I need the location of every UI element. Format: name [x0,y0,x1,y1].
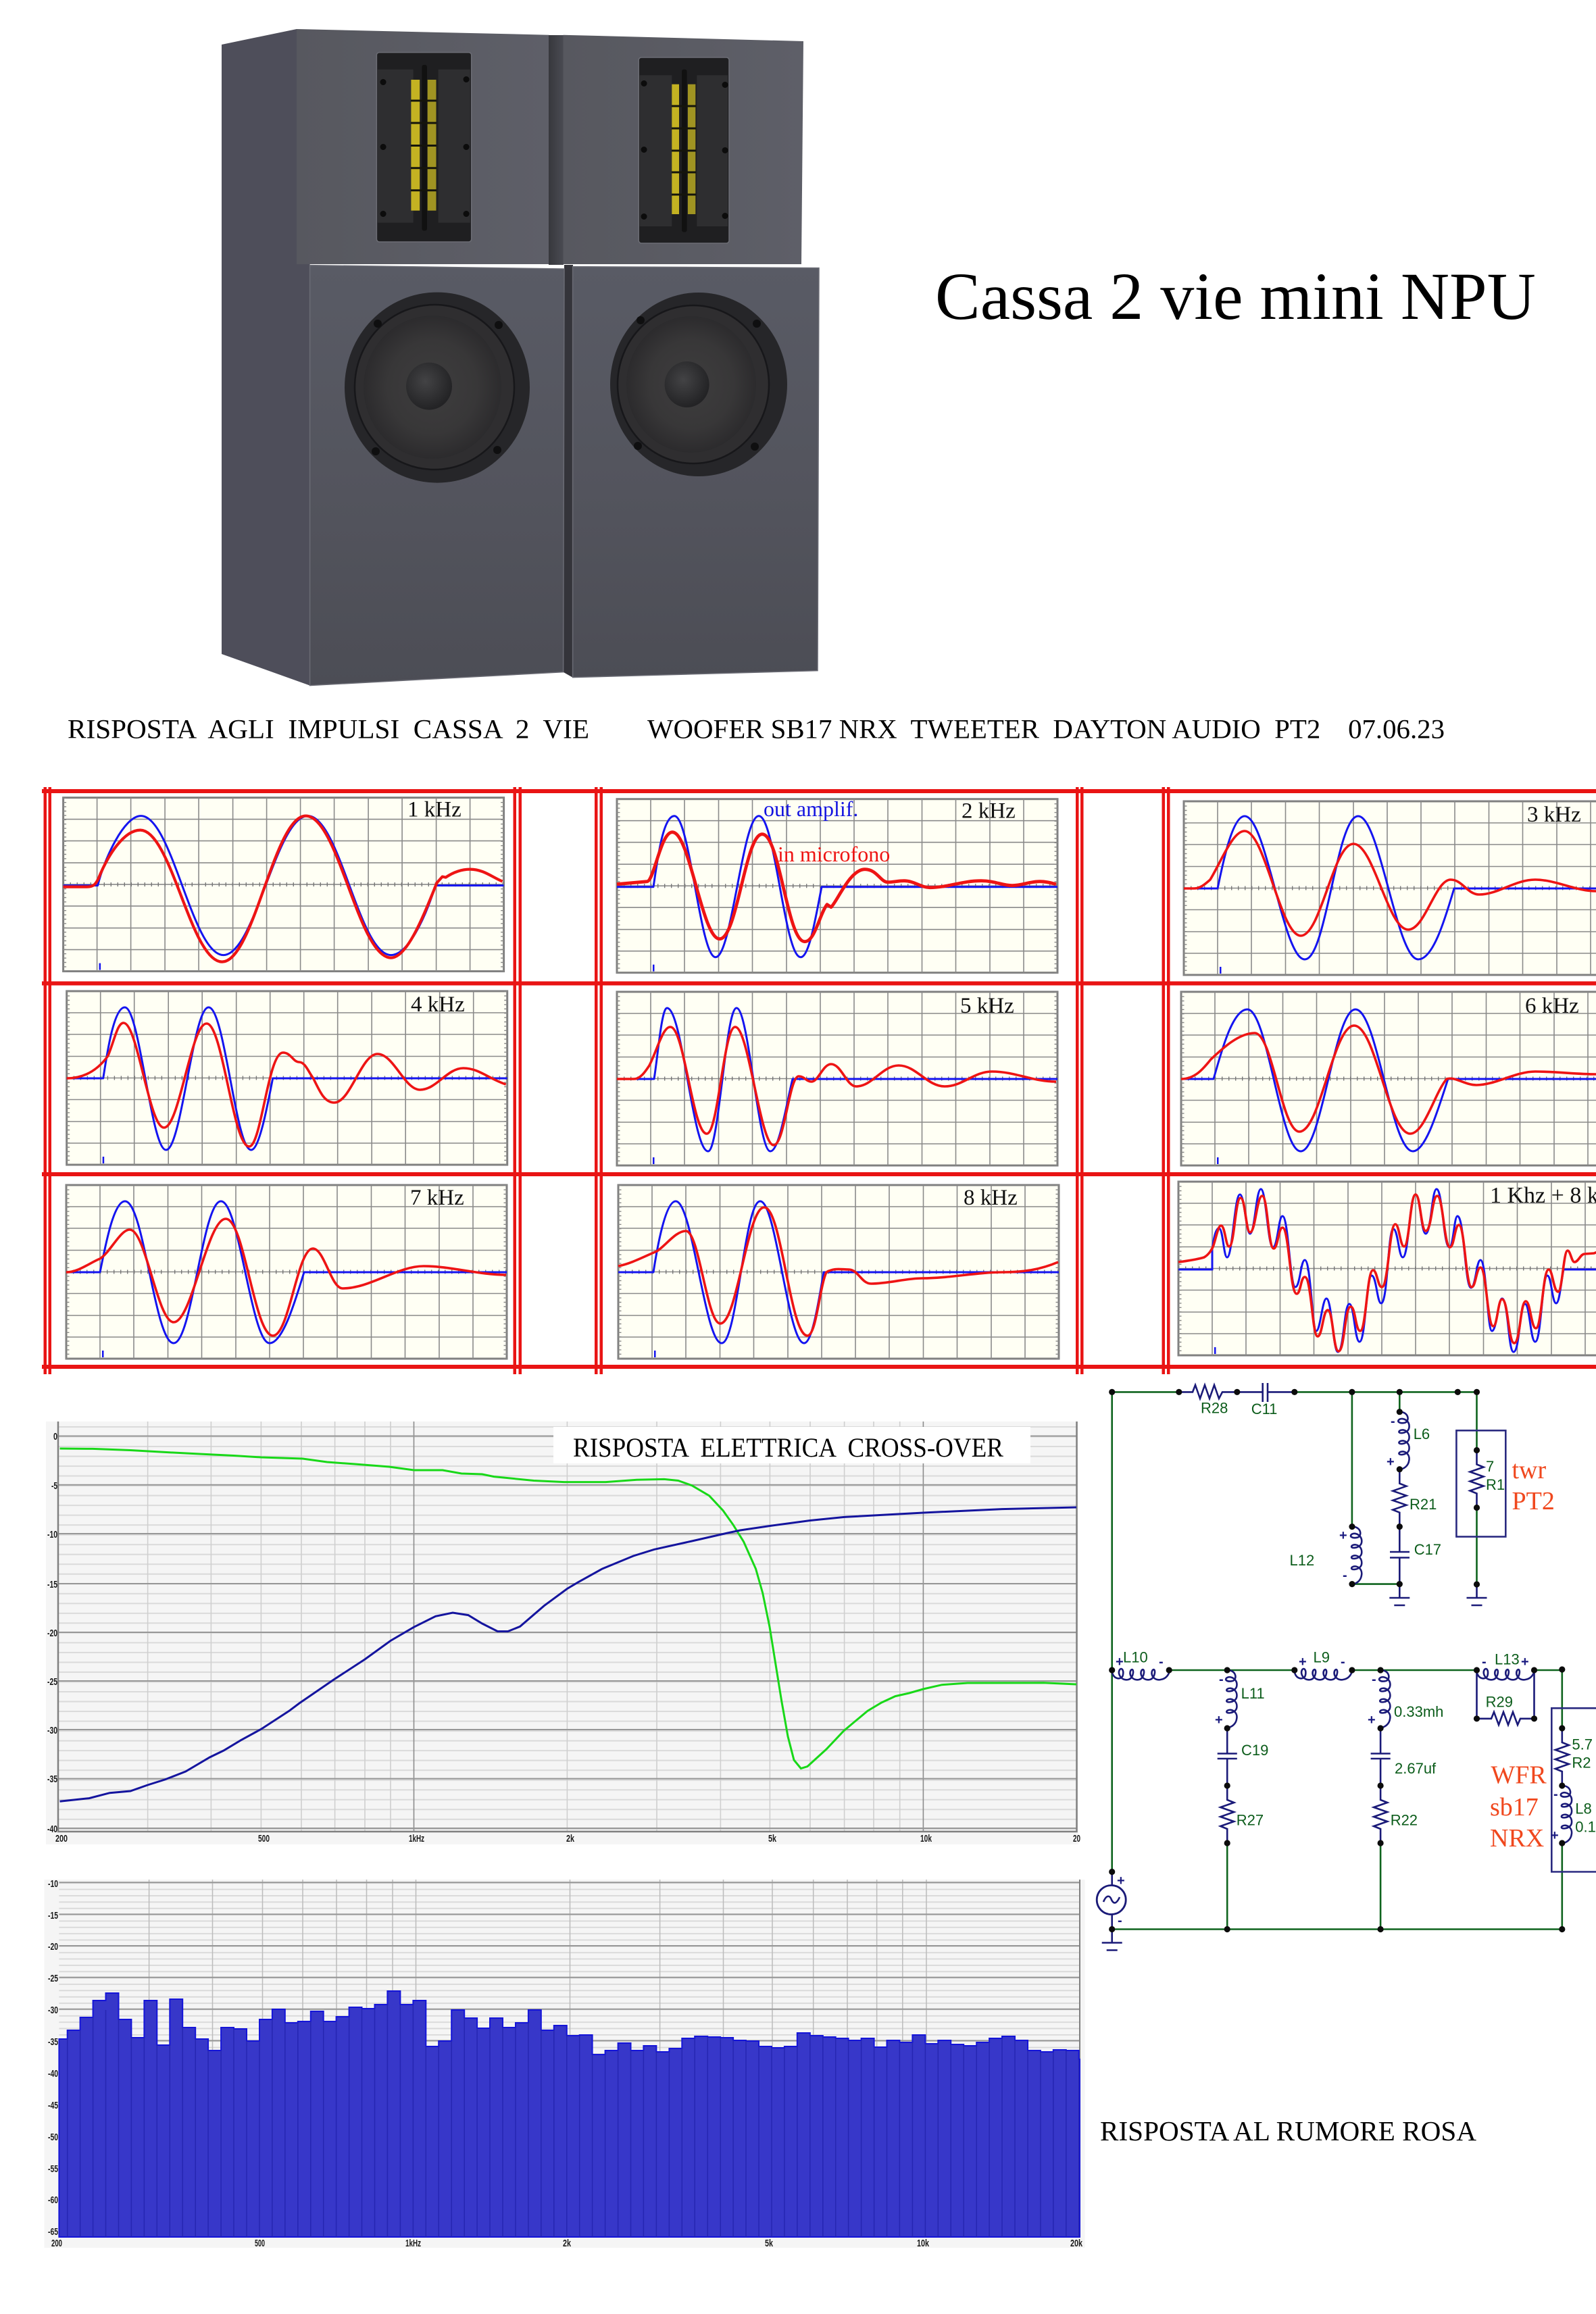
inductor L12: - [1343,1568,1347,1583]
inductor L12: + [1339,1528,1347,1543]
capacitor C11 [1237,1383,1295,1417]
vertical grid lines [148,1422,900,1832]
lower right woofer cabinet [573,267,819,678]
capacitor C11: C11 [1251,1401,1277,1417]
panel: 8 kHz oscilloscope [618,1185,1059,1359]
blue trace [66,1201,507,1343]
capacitor C17: C17 [1414,1541,1441,1558]
panel: 6 kHz oscilloscope [1181,992,1596,1165]
upper left tweeter cabinet [297,29,549,264]
blue trace [618,1201,1059,1343]
major grid lines [59,1882,1080,2040]
y axis labels: -55 [48,2163,58,2175]
y axis labels: -25 [48,1973,58,1984]
caption: pink noise: RISPOSTA AL RUMORE ROSA [1100,2115,1476,2146]
subtitle: impulse response: RISPOSTA AGLI IMPULSI CASSA 2 VIE [68,714,589,745]
major grid lines [58,1436,1077,1828]
resistor R29 [1477,1670,1534,1725]
y axis labels: -35 [47,1774,57,1785]
capacitor 2.67uf: 2.67uf [1395,1760,1437,1777]
tweeter box with R1 [1456,1430,1505,1536]
circuit nodes [1109,1389,1565,1932]
blue trace [1181,1009,1596,1151]
ground symbol 3 [1102,1930,1122,1950]
label: 1 kHz [407,798,462,822]
inductor L6: + [1387,1455,1395,1469]
red trace [617,1027,1056,1145]
label: woofer [1490,1761,1547,1853]
subtitle: drivers and date: WOOFER SB17 NRX TWEETER DAYTON AUDIO PT2 07.06.23 [647,714,1445,745]
inductor L13 [1477,1651,1534,1680]
x axis labels: 20 [1073,1833,1080,1844]
label: 2 kHz [962,799,1016,824]
inductor L10: - [1159,1655,1164,1669]
inductor L6: - [1391,1414,1395,1429]
inductor L10: L10 [1123,1649,1148,1666]
blue trace [617,1008,1057,1151]
speaker pair photo illustration [222,29,819,686]
x axis labels: 1kHz [409,1833,424,1844]
blue trace [617,816,1057,957]
y axis labels: -15 [47,1579,57,1590]
AC source: - [1118,1913,1122,1928]
x axis labels: 200 [55,1833,68,1844]
panel: 3 kHz oscilloscope [1184,801,1596,975]
green curve: woofer [59,1449,1076,1769]
blue trace [1184,816,1596,959]
upper right tweeter cabinet [564,35,803,264]
inductor 0.33mh: + [1368,1713,1376,1728]
crossover schematic [1097,1383,1596,1950]
y axis labels: -20 [47,1628,57,1639]
x axis labels: 1kHz [405,2238,421,2249]
red trace [1184,831,1596,936]
capacitor 2.67uf [1371,1728,1437,1786]
resistor R28: R28 [1201,1399,1228,1416]
AC source: + [1117,1873,1125,1888]
chart: crossover electrical response [46,1422,1080,1844]
capacitor C19: C19 [1241,1742,1268,1759]
x axis labels: 5k [768,1833,776,1844]
red frame around oscilloscope grid [42,787,1596,1374]
minor grid lines [59,1882,1080,2085]
chart background [46,1422,1078,1844]
y axis labels: -40 [48,2068,58,2080]
chart: pink noise response [45,1878,1085,2249]
inductor L9: + [1299,1655,1307,1669]
red trace [1181,1026,1596,1134]
chart background [45,1880,1085,2248]
left woofer [345,293,530,483]
resistor R27: R27 [1237,1812,1264,1829]
resistor R21 [1393,1469,1437,1527]
minor grid lines [58,1426,1077,1832]
label: 4 kHz [411,992,465,1017]
x axis labels: 20k [1070,2238,1082,2249]
blue bar spectrum [59,1991,1080,2237]
lower left woofer cabinet [310,266,564,686]
panel: 5 kHz oscilloscope [617,992,1057,1165]
left ribbon tweeter [376,53,472,242]
y axis labels: -15 [48,1910,58,1921]
inductor L6: L6 [1414,1426,1430,1442]
resistor R21: R21 [1410,1496,1437,1513]
label: tweeter [1512,1456,1555,1515]
inductor L9: L9 [1314,1649,1330,1666]
label: tweeter: twr [1512,1456,1546,1484]
y axis labels: -45 [48,2100,58,2111]
y axis labels [48,1878,58,2238]
y axis labels: -30 [48,2005,58,2016]
right woofer [610,293,787,476]
x axis labels: 200 [51,2238,62,2249]
y axis labels: -20 [48,1941,58,1953]
tweeter box with R1: 7 [1486,1458,1494,1475]
y axis labels: 0 [53,1431,57,1442]
x axis labels: 10k [917,2238,929,2249]
inductor L10 [1112,1649,1170,1680]
capacitor C17 [1390,1527,1441,1584]
woofer box with R2 and L8: 0.1 [1575,1818,1596,1835]
inductor L9 [1295,1649,1352,1680]
y axis labels: -25 [47,1676,57,1688]
legend: red trace: in microfono [778,842,890,866]
resistor R29: R29 [1486,1694,1513,1711]
red trace [1178,1194,1596,1351]
bar separators [68,2005,1079,2237]
legend: blue trace: out amplif. [764,797,858,821]
y axis labels: -65 [48,2226,58,2238]
inductor L12 [1289,1527,1362,1584]
capacitor C19 [1218,1728,1268,1786]
ground symbol 2 [1466,1584,1487,1605]
resistor R28 [1179,1385,1237,1416]
x axis labels [51,2238,1082,2249]
y axis labels: -5 [51,1480,57,1492]
right ribbon tweeter [639,57,729,243]
title backing [553,1427,1030,1463]
label: tweeter: PT2 [1512,1487,1555,1515]
gap between lower cabinets [564,265,573,678]
inductor L11 [1215,1670,1265,1728]
woofer box with R2 and L8 [1551,1708,1596,1871]
x axis labels: 5k [765,2238,773,2249]
AC source [1097,1871,1126,1930]
tweeter box with R1: R1 [1486,1476,1505,1493]
inductor L10: + [1116,1655,1124,1669]
y axis labels: -50 [48,2132,58,2143]
x axis labels [55,1833,1080,1844]
panel: 7 kHz oscilloscope [66,1185,507,1359]
x axis labels: 500 [255,2238,265,2249]
red trace [67,1023,506,1147]
inductor L12: L12 [1289,1552,1314,1569]
red trace [617,832,1056,942]
title: Cassa 2 vie mini NPU [935,259,1536,334]
label: woofer: NRX [1490,1824,1544,1853]
inductor L11: L11 [1241,1685,1265,1702]
x axis labels: 2k [563,2238,571,2249]
inductor L13: L13 [1495,1651,1520,1667]
label: woofer: WFR [1491,1761,1547,1790]
speaker side panel [222,29,310,686]
resistor R27 [1220,1786,1264,1843]
y axis labels: -10 [47,1529,57,1540]
y axis labels: -40 [47,1823,57,1835]
blue trace [64,816,504,955]
woofer box with R2 and L8: L8 [1575,1800,1592,1817]
woofer box with R2 and L8: + [1551,1828,1559,1843]
label: woofer: sb17 [1490,1793,1539,1821]
panel: 4 kHz oscilloscope [67,991,507,1165]
x axis labels: 2k [566,1833,574,1844]
gap between upper cabinets [549,35,564,265]
y axis labels: -30 [47,1725,57,1736]
inductor L11: - [1219,1672,1224,1687]
inductor 0.33mh: - [1372,1672,1376,1687]
y axis labels: -60 [48,2194,58,2206]
y axis labels: -35 [48,2036,58,2048]
panel: 1 kHz + 8 kHz oscilloscope [1178,1182,1596,1355]
inductor L13: - [1482,1655,1487,1669]
resistor R22 [1374,1786,1418,1843]
woofer box with R2 and L8: R2 [1572,1755,1591,1771]
blue trace [67,1007,507,1150]
label: 6 kHz [1525,994,1579,1018]
red trace [618,1207,1058,1336]
inductor L13: + [1521,1655,1529,1669]
blue trace [1178,1189,1596,1352]
inductor L11: + [1215,1713,1223,1728]
resistor R22: R22 [1391,1812,1418,1829]
green wires [1112,1392,1562,1930]
axes [58,1422,1077,1832]
inductor L9: - [1341,1655,1345,1669]
x axis labels: 10k [920,1833,932,1844]
chart title: RISPOSTA ELETTRICA CROSS-OVER [573,1432,1003,1463]
ground symbol 1 [1389,1584,1410,1605]
label: 7 kHz [410,1186,464,1210]
panel: 2 kHz oscilloscope [617,797,1057,973]
red trace [66,1219,506,1336]
vertical grid lines [149,1880,926,2067]
panel: 1 kHz oscilloscope [64,798,504,972]
x axis labels: 500 [258,1833,270,1844]
red trace [64,816,503,962]
blue curve: tweeter [59,1507,1076,1801]
inductor L6 [1387,1412,1430,1469]
label: 5 kHz [960,994,1014,1018]
woofer box with R2 and L8: 5.7 [1572,1736,1593,1753]
inductor 0.33mh [1368,1670,1443,1728]
label: 3 kHz [1527,803,1581,827]
y axis labels: -10 [48,1878,58,1890]
label: 8 kHz [964,1186,1018,1210]
inductor 0.33mh: 0.33mh [1394,1703,1443,1720]
woofer box with R2 and L8: - [1553,1787,1558,1802]
y axis labels [47,1431,57,1835]
